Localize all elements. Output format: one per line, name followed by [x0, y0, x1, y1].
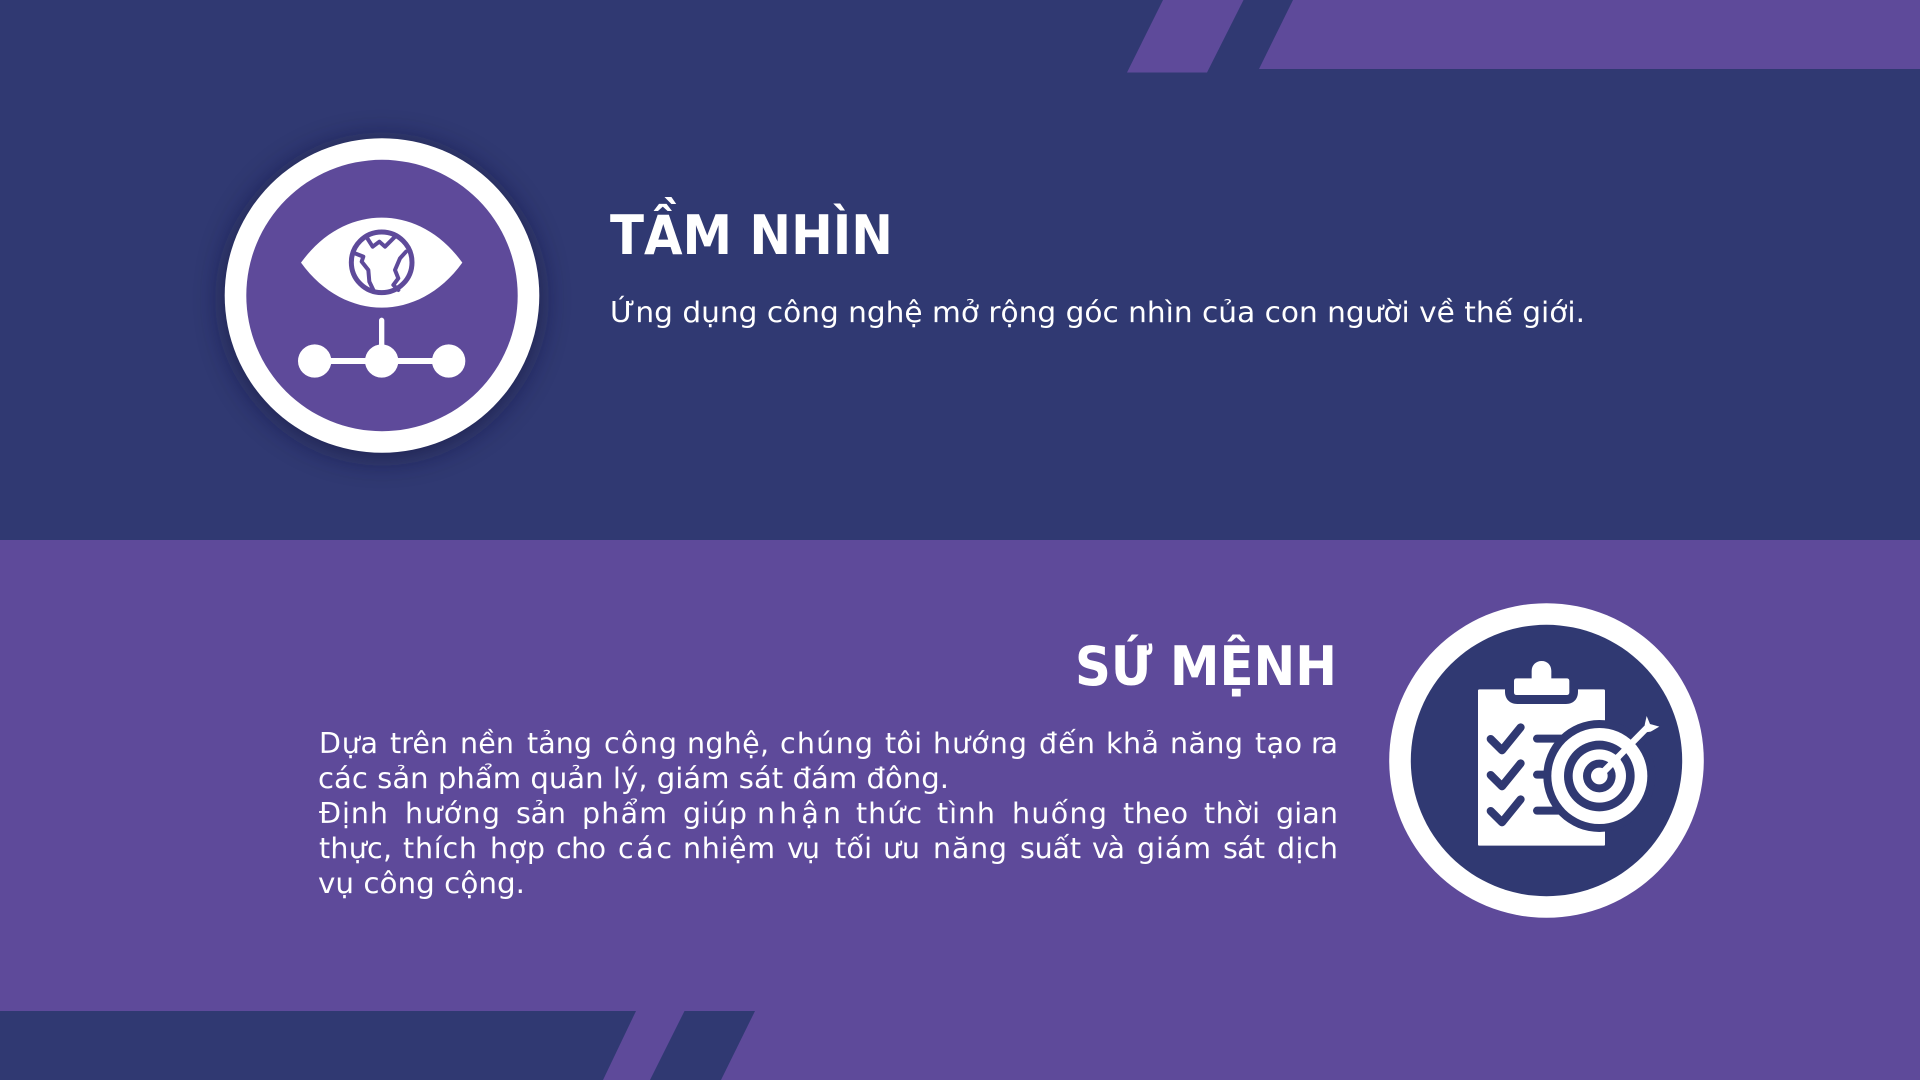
text block: mission description: hướng	[933, 727, 1027, 760]
icon: mission clipboard and target badge	[1389, 603, 1704, 918]
text block: vision description: Ứng dụng công nghệ mở rộng góc nhìn của con người về thế giới.	[610, 295, 1585, 329]
text block: mission description	[318, 727, 1338, 900]
text block: mission description: giám	[1137, 832, 1211, 865]
bottom decorative shapes	[0, 1011, 755, 1080]
text block: mission description: ưu	[883, 832, 920, 865]
text block: mission description: nhiệm	[683, 832, 775, 865]
text block: mission description: vụ	[787, 832, 820, 865]
text block: mission description: hợp	[490, 832, 545, 865]
text block: mission description: tạo	[1255, 727, 1302, 760]
text block: mission description: sát	[1223, 832, 1265, 865]
top decorative shapes	[1127, 0, 1920, 72]
text block: mission description: ra	[1311, 727, 1338, 760]
text block: mission description: giúp	[683, 797, 747, 830]
text block: mission description: chúng	[780, 727, 873, 760]
text block: mission description: các sản phẩm quản lý, giám sát đám đông.	[318, 762, 949, 795]
panel: vision background	[0, 0, 1920, 540]
text block: mission description: thức	[856, 797, 922, 830]
text block: mission description: huống	[1012, 797, 1107, 830]
text block: mission description: năng	[933, 832, 1007, 865]
icon: vision eye and globe badge	[225, 138, 539, 456]
text block: mission description: hướng	[405, 797, 500, 830]
text block: mission description: thực,	[319, 832, 392, 865]
heading: vision: TẦM NHÌN	[610, 197, 893, 267]
text block: mission description: thích	[403, 832, 477, 865]
text block: mission description: công	[604, 727, 677, 760]
text block: mission description: nền	[460, 727, 514, 760]
text block: mission description: và	[1092, 832, 1125, 865]
text block: mission description: gian	[1276, 797, 1338, 830]
text block: mission description: đến	[1039, 727, 1095, 760]
text block: mission description: sản	[516, 797, 566, 830]
text block: mission description: phẩm	[582, 797, 667, 830]
text block: mission description: tình	[937, 797, 995, 830]
text block: mission description: nghệ,	[687, 727, 769, 760]
text block: mission description: nhận	[757, 797, 841, 830]
text block: mission description: trên	[390, 727, 448, 760]
text block: mission description: tối	[835, 832, 872, 865]
text block: mission description: suất	[1020, 832, 1081, 865]
text block: mission description: tảng	[527, 727, 592, 760]
text block: mission description: Định	[319, 797, 388, 830]
text block: mission description: các	[618, 832, 672, 865]
text block: mission description: khả	[1106, 727, 1159, 760]
text block: mission description: Dựa	[319, 727, 378, 760]
text block: mission description: dịch	[1277, 832, 1338, 865]
text block: mission description: năng	[1170, 727, 1243, 760]
text block: mission description: vụ công cộng.	[318, 867, 525, 900]
text block: mission description: cho	[556, 832, 606, 865]
heading: mission: SỨ MỆNH	[1075, 635, 1337, 698]
text block: mission description: theo	[1123, 797, 1188, 830]
text block: mission description: thời	[1204, 797, 1260, 830]
panel: mission background	[0, 540, 1920, 1080]
text block: mission description: tôi	[885, 727, 922, 760]
